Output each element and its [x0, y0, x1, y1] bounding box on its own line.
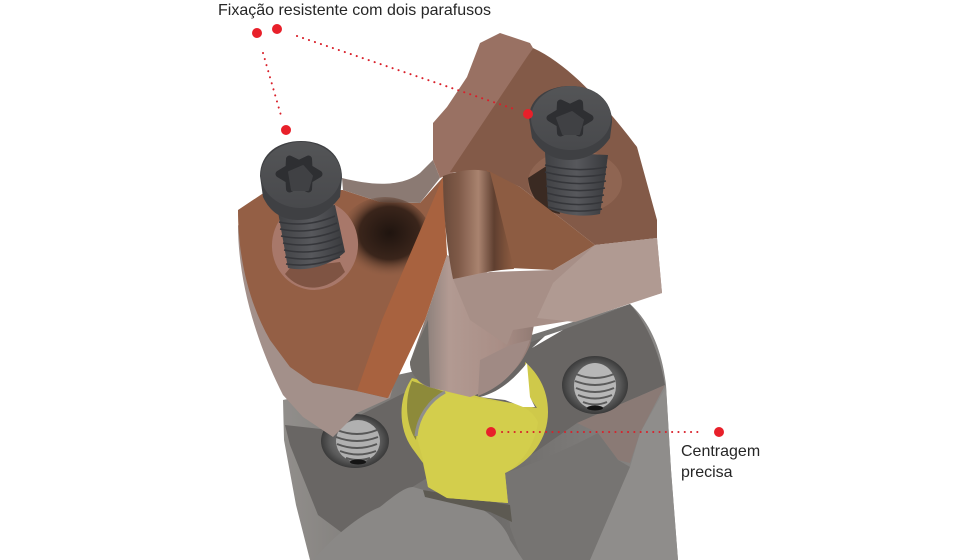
marker dots [486, 427, 724, 437]
tool body [283, 304, 678, 560]
left screw hole [265, 193, 365, 297]
lower centre lobe [313, 487, 523, 560]
pink shank [410, 255, 540, 397]
dark top face [450, 48, 657, 245]
torx socket [550, 103, 590, 134]
right screw hole [528, 150, 622, 214]
left screw [260, 141, 345, 269]
body top face [285, 304, 665, 535]
flute cylinder [443, 170, 514, 279]
callout: fixação [218, 2, 533, 135]
marker dots [252, 24, 533, 135]
heading: Fixação resistente com dois parafusos [218, 2, 491, 19]
pink-grey land [577, 385, 665, 463]
leader lines [263, 36, 517, 119]
light flank facet [433, 33, 533, 178]
shank seat step [478, 340, 530, 396]
dark pocket [339, 197, 431, 277]
right screw [529, 86, 612, 216]
callout: centragem [486, 427, 760, 481]
ball [417, 392, 538, 503]
left insert [238, 160, 447, 437]
label: precisa [681, 464, 733, 481]
yellow centring seat [402, 362, 548, 503]
counterbore right [562, 356, 628, 414]
outer ring [402, 362, 548, 503]
counterbore left [321, 414, 389, 468]
torx socket [279, 159, 319, 190]
label: Centragem [681, 443, 760, 460]
right insert [433, 33, 662, 345]
grey back band [342, 160, 440, 203]
top face [238, 175, 445, 398]
notch block [423, 490, 512, 522]
leader line [502, 431, 702, 433]
flute face [487, 170, 595, 270]
relief flank [238, 225, 400, 437]
inner ring shade [407, 381, 445, 440]
right lobe [505, 433, 630, 560]
pink lower flank [453, 238, 662, 345]
white gap [480, 363, 535, 407]
orange strip [357, 177, 447, 398]
right edge strip [590, 387, 678, 560]
